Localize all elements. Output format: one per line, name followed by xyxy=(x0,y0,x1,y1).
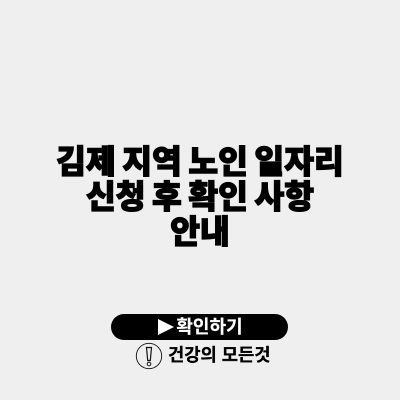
title: 신청 후 확인 사항 xyxy=(86,179,314,215)
brand logo with icon xyxy=(136,342,271,370)
title: 김제 지역 노인 일자리 xyxy=(56,144,344,180)
brand name: 건강의 모든것 xyxy=(168,345,271,365)
button: confirm xyxy=(111,314,288,340)
button: confirm: 확인하기 xyxy=(176,317,243,337)
title: 안내 xyxy=(170,214,230,250)
title xyxy=(56,144,344,250)
icon: exclamation circle xyxy=(136,342,162,370)
